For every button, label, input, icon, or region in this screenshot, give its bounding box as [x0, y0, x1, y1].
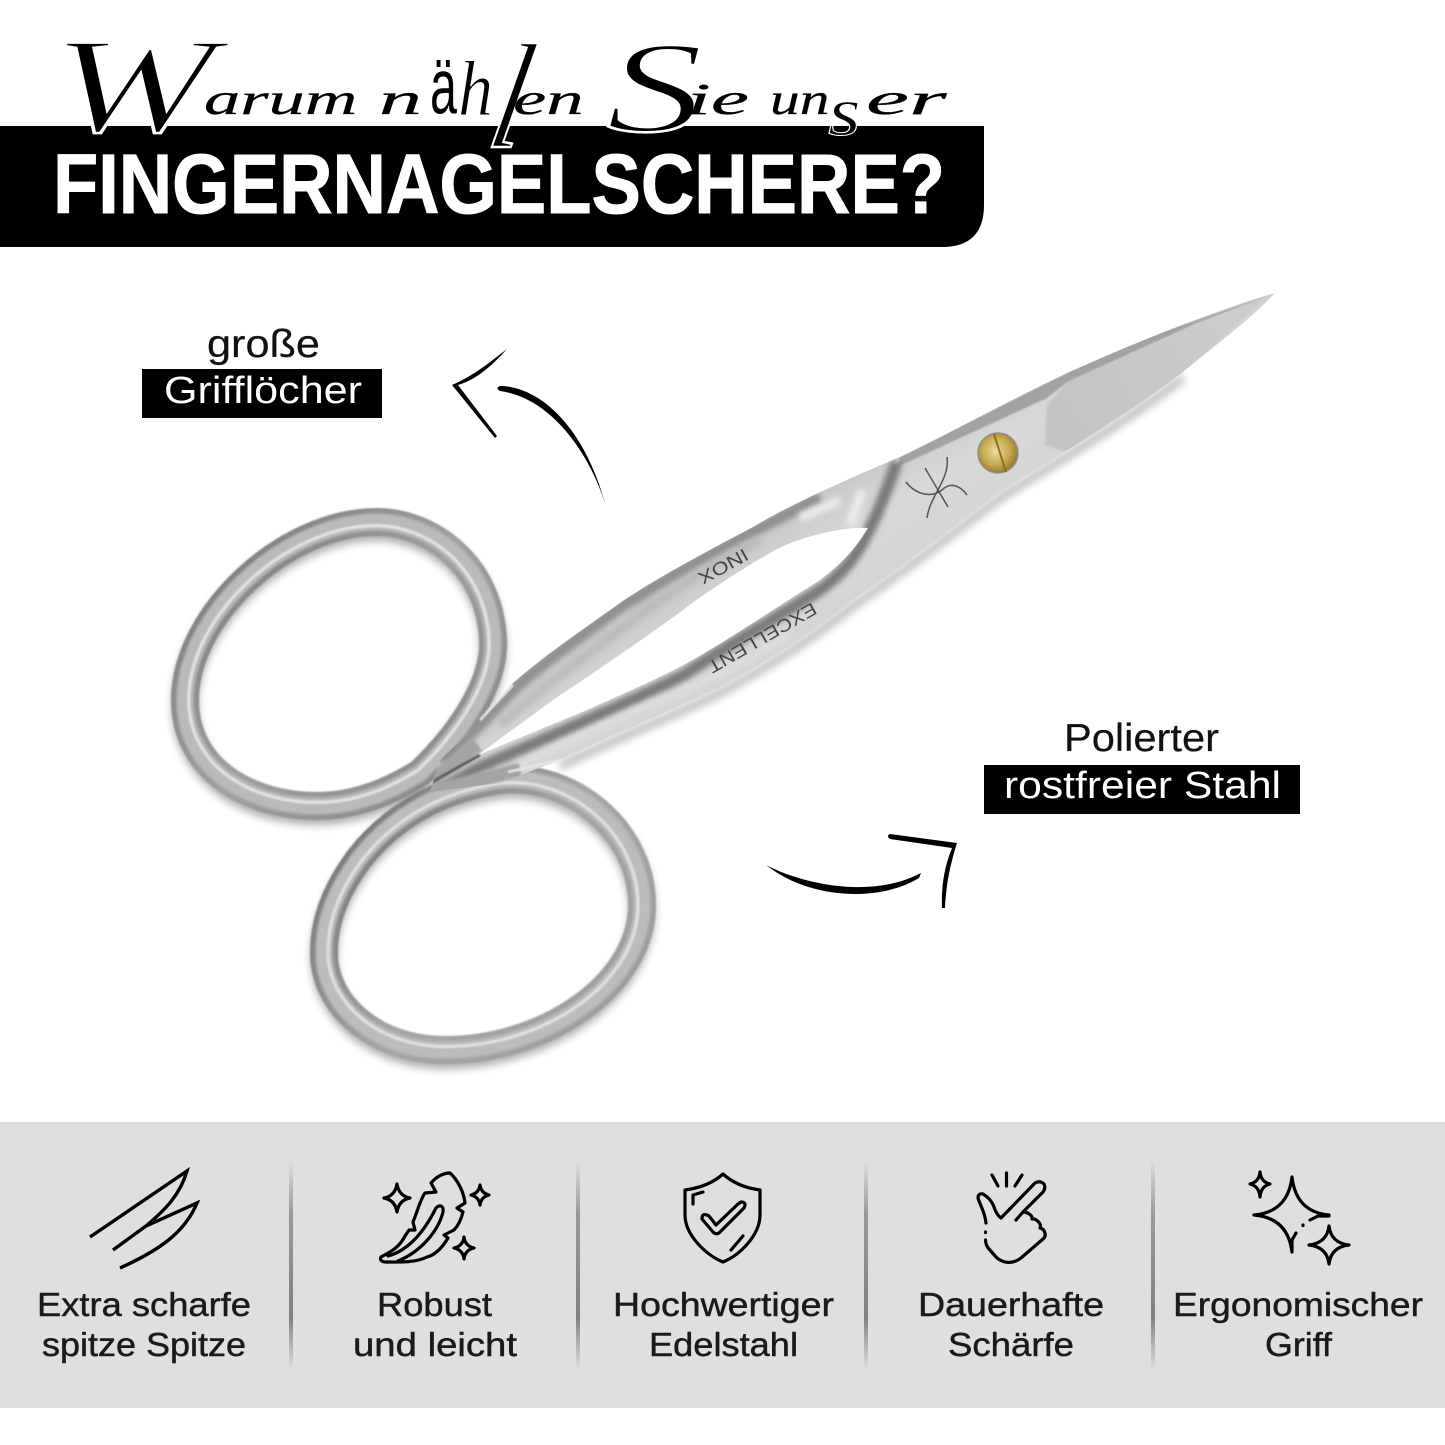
- script title: er: [866, 75, 947, 124]
- feature: high quality steel: [613, 1174, 834, 1363]
- callout: große Grifflöcher: [142, 323, 382, 418]
- script title: en: [513, 75, 584, 124]
- crossing line: [425, 755, 480, 786]
- script title: S: [606, 16, 704, 160]
- caption: [353, 1286, 517, 1363]
- caption: Hochwertiger: [613, 1286, 834, 1323]
- caption: Dauerhafte: [918, 1286, 1104, 1323]
- feature: extra sharp tip: [37, 1171, 251, 1363]
- script title: arum: [204, 75, 357, 124]
- heading banner: [0, 126, 984, 247]
- icon: sparkles: [1250, 1172, 1349, 1264]
- caption: spitze Spitze: [42, 1326, 246, 1363]
- script title: s: [828, 74, 861, 151]
- blade and shanks: [400, 293, 1275, 812]
- callout box: [142, 369, 382, 418]
- script title: ie: [687, 75, 749, 124]
- callout line 2: rostfreier Stahl: [1004, 765, 1281, 807]
- engraved text: EXCELLENT: EXCELLENT: [704, 599, 820, 677]
- script word: Warum: [52, 12, 357, 161]
- icon: snapping fingers: [978, 1173, 1045, 1262]
- blade facet: [1045, 293, 1275, 452]
- upper shank top shading: [440, 497, 820, 762]
- callout line 2: Grifflöcher: [164, 370, 362, 412]
- engraved text: INOX: INOX: [695, 545, 752, 588]
- script title: ä: [430, 42, 457, 130]
- arrow: toward handle: [452, 349, 605, 503]
- caption: [1173, 1286, 1423, 1363]
- panel background: [0, 1122, 1445, 1408]
- icon: sharp tips: [90, 1171, 197, 1268]
- caption: [918, 1286, 1104, 1363]
- script title: h: [458, 45, 493, 132]
- upper shank body: [500, 540, 760, 725]
- caption: Griff: [1265, 1326, 1333, 1363]
- caption: Extra scharfe: [37, 1286, 251, 1323]
- callout line 1: Polierter: [1064, 717, 1219, 760]
- callout: Polierter rostfreier Stahl: [984, 717, 1300, 814]
- main heading: FINGERNAGELSCHERE?: [53, 137, 945, 231]
- blade bevel: [897, 293, 1275, 467]
- scissors: [185, 293, 1275, 1056]
- feature panel: [0, 1122, 1445, 1408]
- finger ring: lower right: [324, 779, 642, 1050]
- icon: shield with check: [685, 1174, 760, 1262]
- script title: n: [379, 75, 422, 124]
- caption: und leicht: [353, 1326, 517, 1363]
- script title: l: [478, 14, 547, 180]
- pivot groove and lower shank dark band: [400, 462, 897, 812]
- script word: unser: [770, 74, 948, 151]
- arrow: toward blade: [766, 834, 957, 908]
- lower shank highlight: [537, 691, 674, 752]
- shank highlight near pivot: [800, 490, 862, 525]
- ring join crease: [480, 685, 560, 772]
- script word: wählen: [379, 14, 584, 180]
- caption: Robust: [377, 1286, 492, 1323]
- caption: Ergonomischer: [1173, 1286, 1423, 1323]
- scissors shadow: [185, 378, 1183, 1056]
- tail blend: [430, 745, 520, 792]
- script title: un: [770, 75, 829, 124]
- caption: [613, 1286, 834, 1363]
- script word: Sie: [606, 16, 749, 160]
- pivot screw: [978, 433, 1018, 473]
- banner bar: [0, 126, 984, 247]
- script title: W: [52, 12, 215, 161]
- caption: Schärfe: [948, 1326, 1074, 1363]
- callout line 1: große: [207, 323, 320, 366]
- feature: lasting sharpness: [918, 1173, 1104, 1363]
- feature: ergonomic grip: [1173, 1172, 1423, 1363]
- callout box: [984, 765, 1300, 814]
- finger ring: upper left: [185, 522, 493, 806]
- icon: feather with sparkles: [380, 1173, 489, 1262]
- feature: robust and light: [353, 1173, 517, 1363]
- caption: Edelstahl: [649, 1326, 798, 1363]
- caption: [37, 1286, 251, 1363]
- script title: [52, 12, 948, 180]
- engraved logo: [906, 457, 967, 518]
